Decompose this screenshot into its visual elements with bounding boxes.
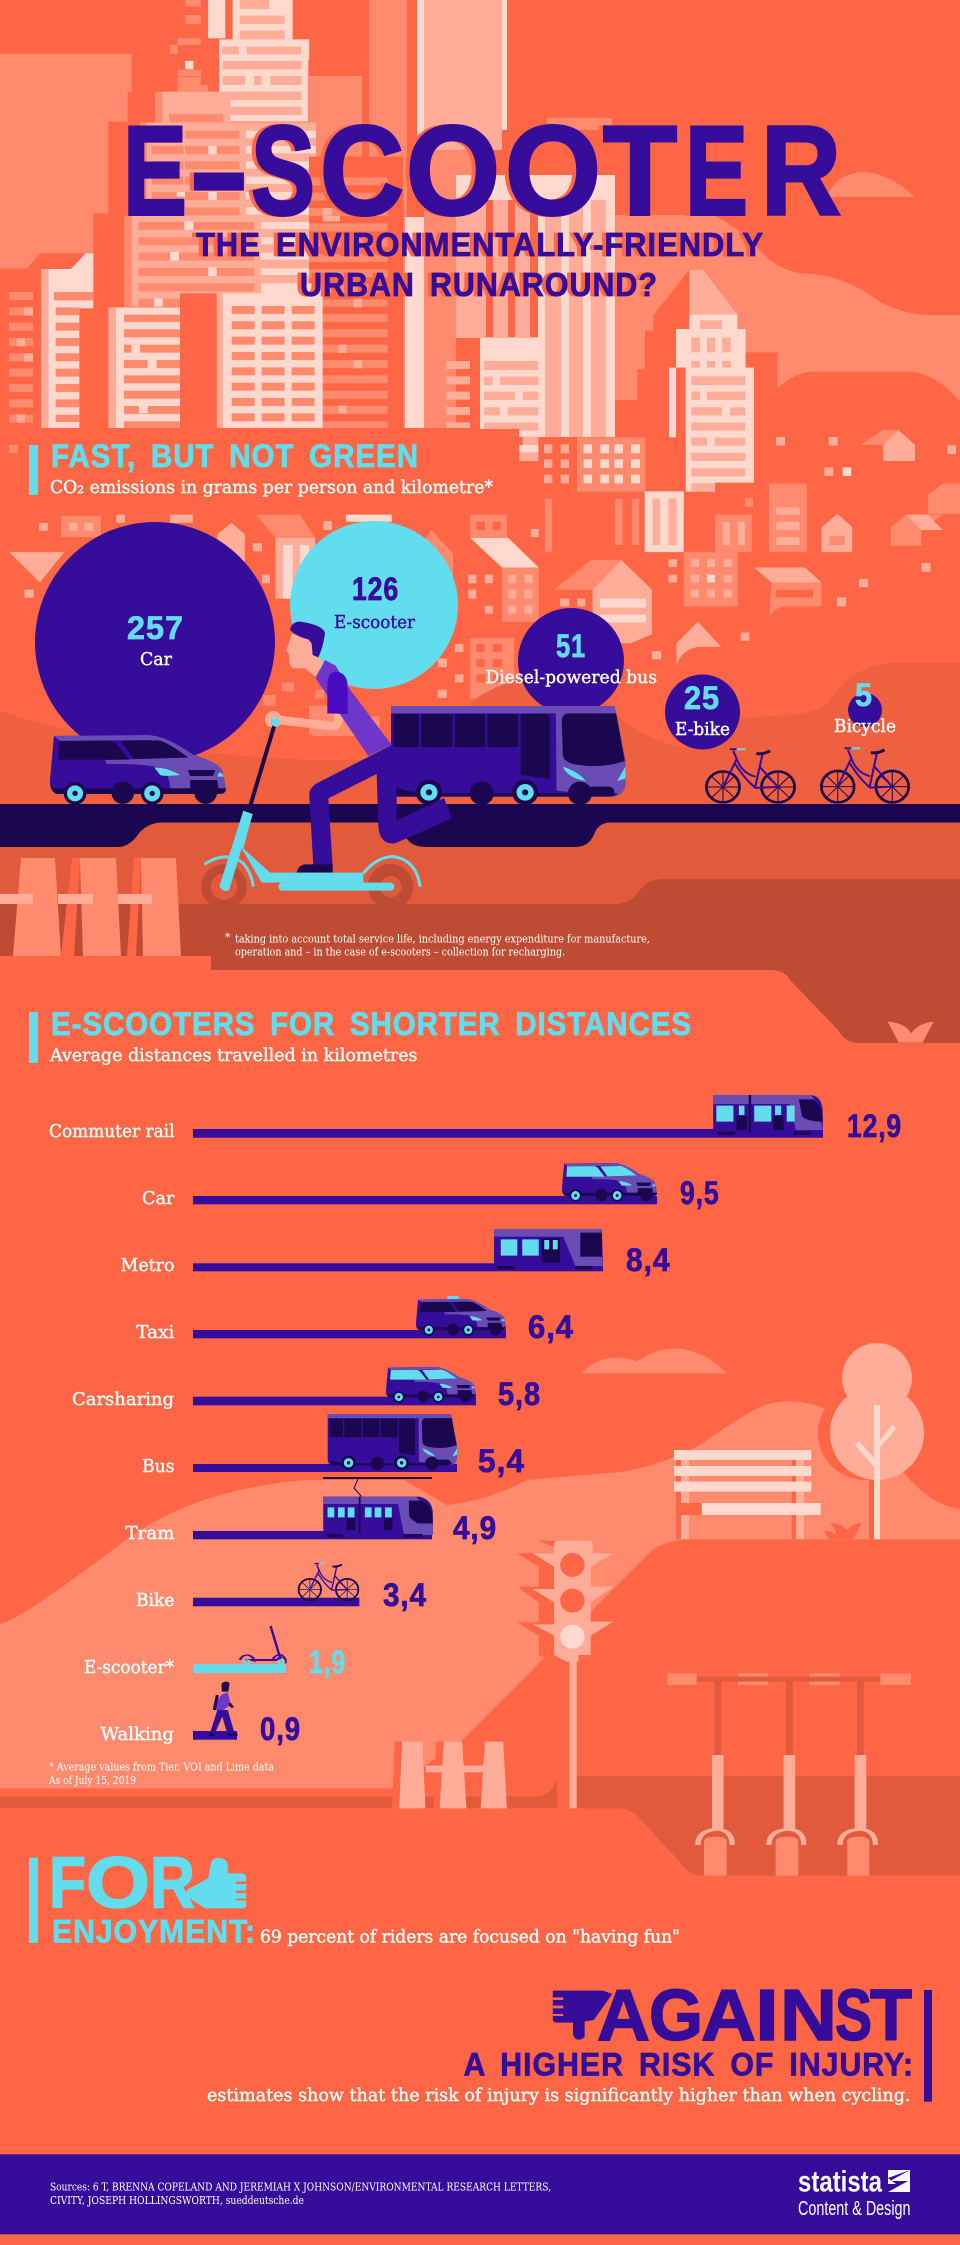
city skyline (0, 0, 960, 513)
footnote: service life (225, 931, 650, 959)
title (123, 100, 841, 303)
panel: against: A HIGHER RISK OF INJURY: (464, 2047, 914, 2083)
title: C (320, 100, 404, 242)
row: carsharing (72, 1367, 541, 1412)
row: bus: Bus (142, 1456, 174, 1477)
row: taxi (136, 1296, 574, 1345)
row: bike: 3,4 (383, 1577, 427, 1613)
row: walking: Walking (100, 1724, 174, 1745)
panel: against (207, 1976, 932, 2106)
footnote: service life: operation and – in the case of e-scooters – collection for recharging. (235, 946, 565, 959)
cones near traffic light (392, 1742, 507, 1808)
traffic light (517, 1541, 613, 1808)
title: E (123, 100, 187, 242)
plant near bench (824, 1523, 862, 1539)
section heading: shorter distances: Average distances travelled in kilometres (49, 1045, 417, 1066)
row: tram: Tram (126, 1523, 174, 1544)
car (50, 735, 226, 805)
row: carsharing: Carsharing (72, 1389, 174, 1410)
panel: against: A (597, 1976, 650, 2056)
row: walking (100, 1682, 301, 1747)
panel: for: O (86, 1844, 150, 1924)
plant on dark band (888, 1022, 934, 1043)
sources: CIVITY, JOSEPH HOLLINGSWORTH, sueddeutsche.de (50, 2193, 304, 2207)
small houses behind the circles (9, 484, 960, 736)
section heading: fast but not green (29, 438, 493, 498)
row: commuter rail (49, 1095, 902, 1144)
circle: e-scooter (290, 521, 458, 689)
footnote: data source (48, 1761, 274, 1787)
panel: against: G (649, 1976, 703, 2056)
circle: diesel bus (518, 608, 624, 714)
circle: car (35, 522, 275, 762)
row: e-scooter: E-scooter* (84, 1657, 174, 1678)
title: T (603, 100, 677, 242)
row: taxi: Taxi (136, 1322, 175, 1343)
road cones (0, 858, 181, 956)
row: carsharing: 5,8 (498, 1376, 541, 1412)
statista logo: statista (798, 2166, 882, 2198)
lower ground (0, 822, 960, 906)
left towers (0, 54, 470, 437)
footnote: service life: taking into account total service life, including energy expenditure for manufacture, (235, 932, 650, 946)
hills behind the bar chart (0, 1401, 960, 1820)
bench (674, 1450, 821, 1539)
row: tram: 4,9 (453, 1510, 497, 1546)
row: taxi: 6,4 (528, 1309, 574, 1345)
parked scooters (698, 1755, 875, 1876)
row: e-scooter: 1,9 (309, 1644, 346, 1680)
row: e-scooter (84, 1626, 346, 1680)
circle labels: 25 (684, 680, 720, 716)
panel: for (29, 1844, 680, 1950)
statista logo: Content & Design (798, 2198, 910, 2220)
icon: thumbs up (187, 1858, 246, 1908)
panel: against: N (780, 1976, 837, 2056)
circle labels: Car (140, 649, 172, 670)
ground hill (0, 663, 960, 810)
title: R (761, 100, 841, 242)
row: commuter rail: Commuter rail (49, 1121, 175, 1142)
footnote: service life: * (225, 931, 231, 944)
row: bike: Bike (136, 1590, 174, 1611)
title: URBAN RUNAROUND? (300, 266, 658, 303)
icon: thumbs down (553, 1991, 612, 2040)
row: bike (136, 1564, 427, 1613)
hill and cloud (615, 215, 960, 500)
circle: bicycle (848, 693, 882, 727)
tower tops (170, 0, 309, 85)
rider on e-scooter (204, 622, 452, 891)
row: car: Car (142, 1188, 175, 1209)
tall tower columns (369, 0, 407, 428)
row: tram (126, 1477, 497, 1546)
tree (818, 1343, 924, 1540)
footnote: data source: * Average values from Tier, VOI and Lime data (49, 1761, 274, 1774)
circle labels: 5 (855, 677, 873, 713)
bikes (706, 748, 909, 802)
sources (50, 2180, 551, 2207)
circle: e-bike (665, 674, 740, 750)
panel: for: R (150, 1844, 195, 1924)
circle labels (127, 571, 896, 740)
panel: against: estimates show that the risk of injury is significantly higher than when cycling. (207, 2085, 910, 2106)
panel: against: I (755, 1976, 779, 2056)
statista logo (798, 2166, 910, 2220)
panel: against: T (870, 1976, 912, 2056)
row: metro (120, 1229, 670, 1278)
circle labels: 51 (556, 628, 586, 664)
panel: against: S (835, 1976, 872, 2056)
circle labels: Bicycle (834, 716, 896, 737)
panel: for: ENJOYMENT: (52, 1914, 256, 1950)
row: car: 9,5 (680, 1175, 720, 1211)
panel: against: A (701, 1976, 756, 2056)
row: car (142, 1163, 720, 1211)
row: bus: 5,4 (478, 1443, 525, 1479)
circle labels: 126 (352, 571, 399, 607)
title: S (251, 100, 315, 242)
row: metro: Metro (120, 1255, 174, 1276)
circle labels: 257 (127, 610, 184, 646)
title: E (685, 100, 748, 242)
row: walking: 0,9 (260, 1711, 301, 1747)
front hill and ground (0, 1539, 960, 1980)
cloud (582, 1348, 727, 1373)
row: commuter rail: 12,9 (847, 1108, 902, 1144)
title: - (189, 100, 249, 242)
circle labels: E-scooter (334, 612, 415, 633)
panel: for: 69 percent of riders are focused on "having fun" (260, 1927, 680, 1948)
footnote: data source: As of July 15, 2019 (48, 1774, 136, 1787)
footer (0, 2154, 960, 2234)
title: O (406, 100, 500, 242)
window block (539, 368, 915, 492)
title: O (505, 100, 601, 242)
row: bus (142, 1414, 525, 1479)
section heading: fast but not green: CO₂ emissions in grams per person and kilometre* (50, 477, 493, 498)
section heading: shorter distances (29, 1006, 692, 1066)
row: metro: 8,4 (626, 1242, 670, 1278)
dark lower band (0, 879, 960, 1043)
scooter wheels (201, 864, 413, 909)
ground band (0, 428, 960, 500)
section heading: shorter distances: E-SCOOTERS FOR SHORTER DISTANCES (51, 1006, 692, 1042)
title: THE ENVIRONMENTALLY-FRIENDLY (196, 226, 764, 263)
panel: for: F (49, 1844, 86, 1924)
circle labels: Diesel-powered bus (486, 667, 657, 688)
circle labels: E-bike (675, 719, 730, 740)
road (0, 804, 960, 847)
section heading: fast but not green: FAST, BUT NOT GREEN (51, 438, 419, 474)
bar chart (49, 1095, 902, 1747)
bus (391, 706, 626, 805)
sources: Sources: 6 T, BRENNA COPELAND AND JEREMIAH X JOHNSON/ENVIRONMENTAL RESEARCH LETTERS, (50, 2180, 551, 2194)
right tower (480, 270, 960, 513)
